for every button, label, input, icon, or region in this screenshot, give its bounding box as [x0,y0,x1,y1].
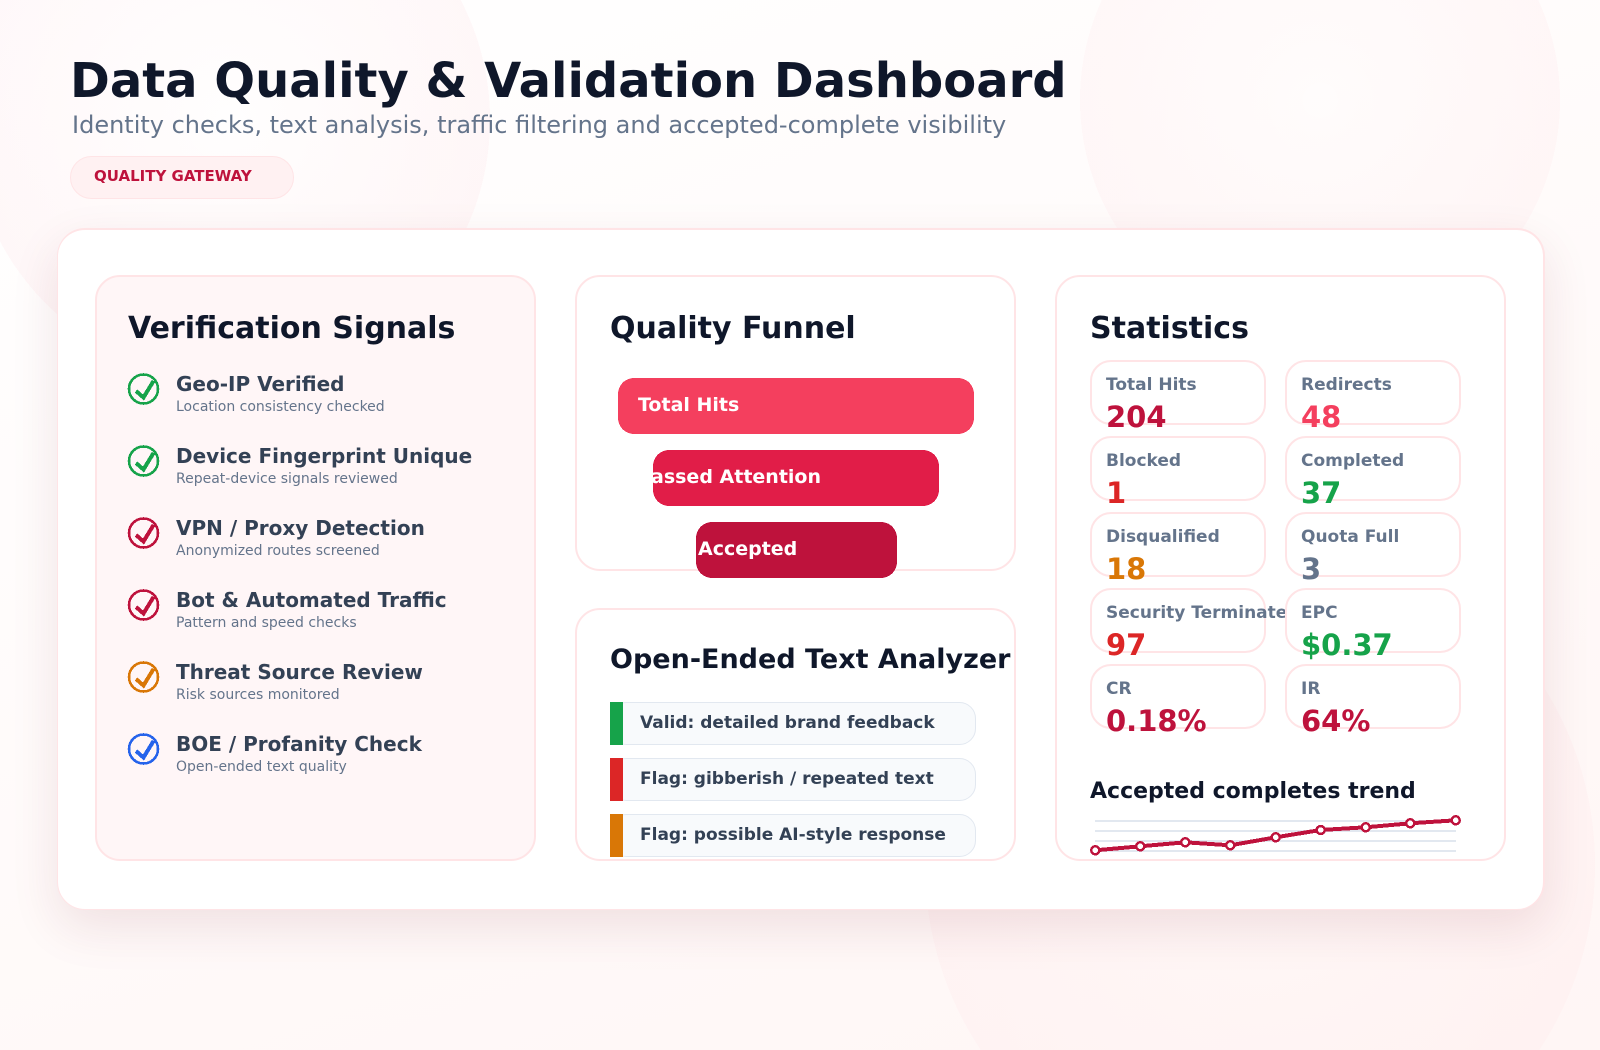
panel: open-ended text analyzer [576,609,1015,860]
panel: verification signals [96,276,535,860]
funnel bar: total hits: Total Hits [638,394,739,416]
analyzer row: ai-style [610,814,976,857]
stat: quota full: 3 [1301,552,1321,586]
stat: security terminate: Security Terminate [1106,603,1287,623]
stat: epc: EPC [1301,603,1338,623]
stat: redirects: Redirects [1301,375,1392,395]
signal: geo-ip verified [129,372,385,415]
stat: ir: IR [1301,679,1320,699]
signal: bot and automated traffic: Bot & Automated Traffic [176,588,447,612]
signal: device fingerprint unique: Repeat-device signals reviewed [176,471,398,487]
stat: cr: 0.18% [1106,704,1207,738]
stat: quota full [1286,513,1460,586]
stat: completed: 37 [1301,476,1341,510]
signal: threat source review [129,660,423,703]
signal: boe profanity check: BOE / Profanity Check [176,732,423,756]
funnel bar: total hits [618,378,974,434]
stat: epc [1286,589,1460,662]
signal: boe profanity check [129,732,423,775]
signal: device fingerprint unique: Device Fingerprint Unique [176,444,472,468]
signal: geo-ip verified: Location consistency checked [176,399,385,415]
heading: open-ended text analyzer: Open-Ended Text Analyzer [610,644,1011,675]
stat: completed [1286,437,1460,510]
analyzer row: gibberish: Flag: gibberish / repeated text [640,769,934,789]
signal: vpn proxy detection: Anonymized routes screened [176,543,380,559]
subtitle: Identity checks, text analysis, traffic filtering and accepted-complete visibility [72,111,1006,139]
signal: geo-ip verified: Geo-IP Verified [176,372,344,396]
funnel bar: accepted: Accepted [698,538,797,560]
funnel bar: passed attention: Passed Attention [638,466,821,488]
panel: quality funnel [576,276,1015,578]
stat: blocked: 1 [1106,476,1126,510]
stat: disqualified: Disqualified [1106,527,1220,547]
stat: ir: 64% [1301,704,1370,738]
stat: disqualified: 18 [1106,552,1146,586]
heading: statistics: Statistics [1090,311,1249,346]
stat: cr: CR [1106,679,1132,699]
signal: threat source review: Risk sources monitored [176,687,340,703]
background circle: top right [1070,0,1570,350]
stat: cr [1091,665,1265,738]
header [70,53,1067,198]
signal: bot and automated traffic: Pattern and speed checks [176,615,357,631]
heading: accepted completes trend: Accepted completes trend [1090,779,1416,804]
stat: total hits [1091,361,1265,434]
analyzer row: ai-style: Flag: possible AI-style response [640,825,946,845]
analyzer row: valid: Valid: detailed brand feedback [640,713,935,733]
background circle: top left [0,0,500,390]
stat: epc: $0.37 [1301,628,1393,662]
badge: quality gateway [70,156,294,198]
stat: blocked [1091,437,1265,510]
stat: redirects [1286,361,1460,434]
stat: disqualified [1091,513,1265,586]
analyzer row: gibberish [610,758,976,801]
panel: statistics [1056,276,1505,860]
analyzer row: valid [610,702,976,745]
heading: quality funnel: Quality Funnel [610,311,856,346]
signal: threat source review: Threat Source Review [176,660,423,684]
stat: security terminate [1091,589,1287,662]
signal: vpn proxy detection [129,516,425,559]
background circle: bottom right [920,530,1600,1050]
stat: blocked: Blocked [1106,451,1181,471]
stat: redirects: 48 [1301,400,1341,434]
signal: device fingerprint unique [129,444,472,487]
stat: total hits: 204 [1106,400,1167,434]
badge: quality gateway: QUALITY GATEWAY [94,167,253,185]
stat: ir [1286,665,1460,738]
dashboard content [70,60,1506,861]
title: Data Quality & Validation Dashboard [70,53,1067,109]
heading: verification signals: Verification Signals [128,311,455,346]
stat: completed: Completed [1301,451,1404,471]
stat: quota full: Quota Full [1301,527,1399,547]
funnel bar: accepted [696,522,897,578]
line chart: accepted completes trend [1091,816,1460,854]
funnel bar: passed attention [638,450,939,506]
signal: boe profanity check: Open-ended text quality [176,759,347,775]
signal: vpn proxy detection: VPN / Proxy Detection [176,516,425,540]
stat: security terminate: 97 [1106,628,1146,662]
main card [57,228,1545,910]
signal: bot and automated traffic [129,588,447,631]
stat: total hits: Total Hits [1106,375,1197,395]
